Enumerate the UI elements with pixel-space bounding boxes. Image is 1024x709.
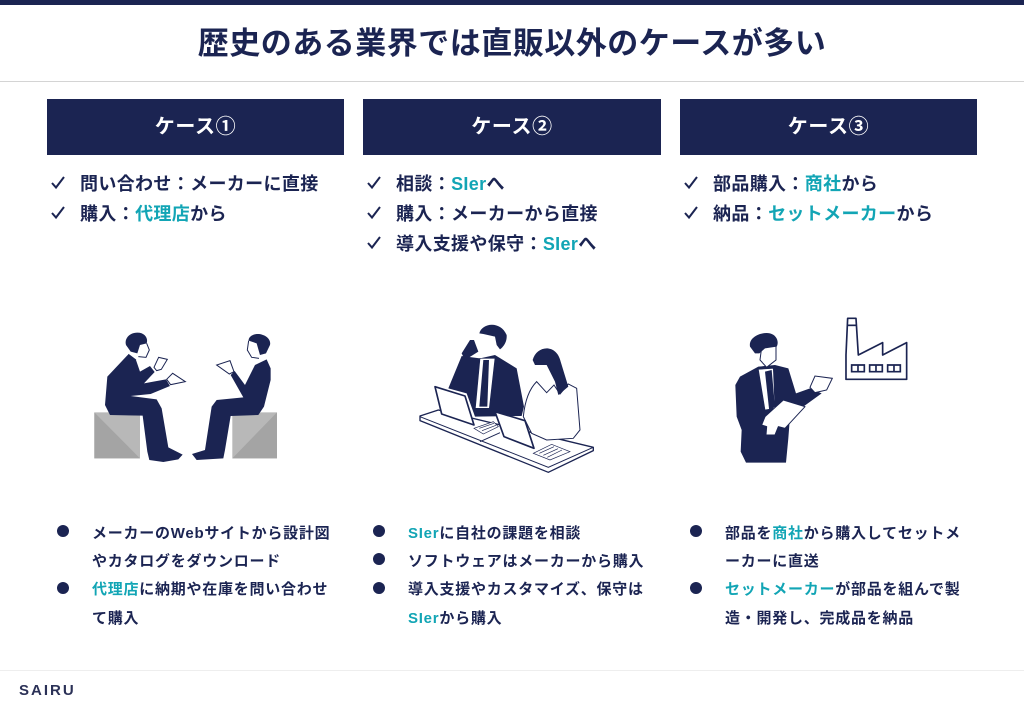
panel: case 1 header	[47, 99, 344, 155]
panel: case 3 header: ケース③	[788, 116, 869, 138]
bullet list: case 2: 導入支援やカスタマイズ、保守は	[408, 581, 644, 598]
checklist: case 2: 導入支援や保守：SIerへ	[396, 234, 597, 254]
bullet list: case 2: SIerから購入	[408, 610, 502, 627]
checklist: case 3	[684, 174, 933, 224]
bullet list: case 2: ソフトウェアはメーカーから購入	[408, 553, 644, 570]
panel: case 3 header	[680, 99, 977, 155]
checklist: case 3: 納品：セットメーカーから	[713, 204, 933, 224]
footer divider	[0, 670, 1024, 671]
logo: SAIRU: SAIRU	[19, 682, 76, 699]
bullet list: case 3: 部品を商社から購入してセットメ	[725, 525, 961, 542]
checklist: case 1	[51, 174, 319, 224]
panel: case 2 header	[363, 99, 661, 155]
checklist: case 2: 相談：SIerへ	[396, 174, 505, 194]
bullet list: case 1	[57, 525, 330, 627]
checklist: case 1: 問い合わせ：メーカーに直接	[80, 174, 319, 194]
checklist: case 3: 部品購入：商社から	[713, 174, 878, 194]
bullet list: case 2: SIerに自社の課題を相談	[408, 525, 581, 542]
bullet list: case 3: セットメーカーが部品を組んで製	[725, 581, 961, 598]
bullet list: case 1: て購入	[92, 610, 139, 627]
bullet list: case 1: 代理店に納期や在庫を問い合わせ	[92, 581, 328, 598]
title divider	[0, 81, 1024, 82]
bullet list: case 3: 造・開発し、完成品を納品	[725, 610, 914, 627]
top bar	[0, 0, 1024, 5]
bullet list: case 1: メーカーのWebサイトから設計図	[92, 525, 330, 542]
bullet list: case 3: ーカーに直送	[725, 553, 820, 570]
panel: case 1 header: ケース①	[155, 116, 236, 138]
checklist: case 1: 購入：代理店から	[80, 204, 227, 224]
title: 歴史のある業界では直販以外のケースが多い	[198, 26, 826, 61]
bullet list: case 1: やカタログをダウンロード	[92, 553, 281, 570]
bullet list: case 2	[373, 525, 644, 627]
checklist: case 2: 購入：メーカーから直接	[396, 204, 598, 224]
checklist: case 2	[367, 174, 598, 254]
panel: case 2 header: ケース②	[471, 116, 553, 138]
bullet list: case 3	[690, 525, 961, 627]
